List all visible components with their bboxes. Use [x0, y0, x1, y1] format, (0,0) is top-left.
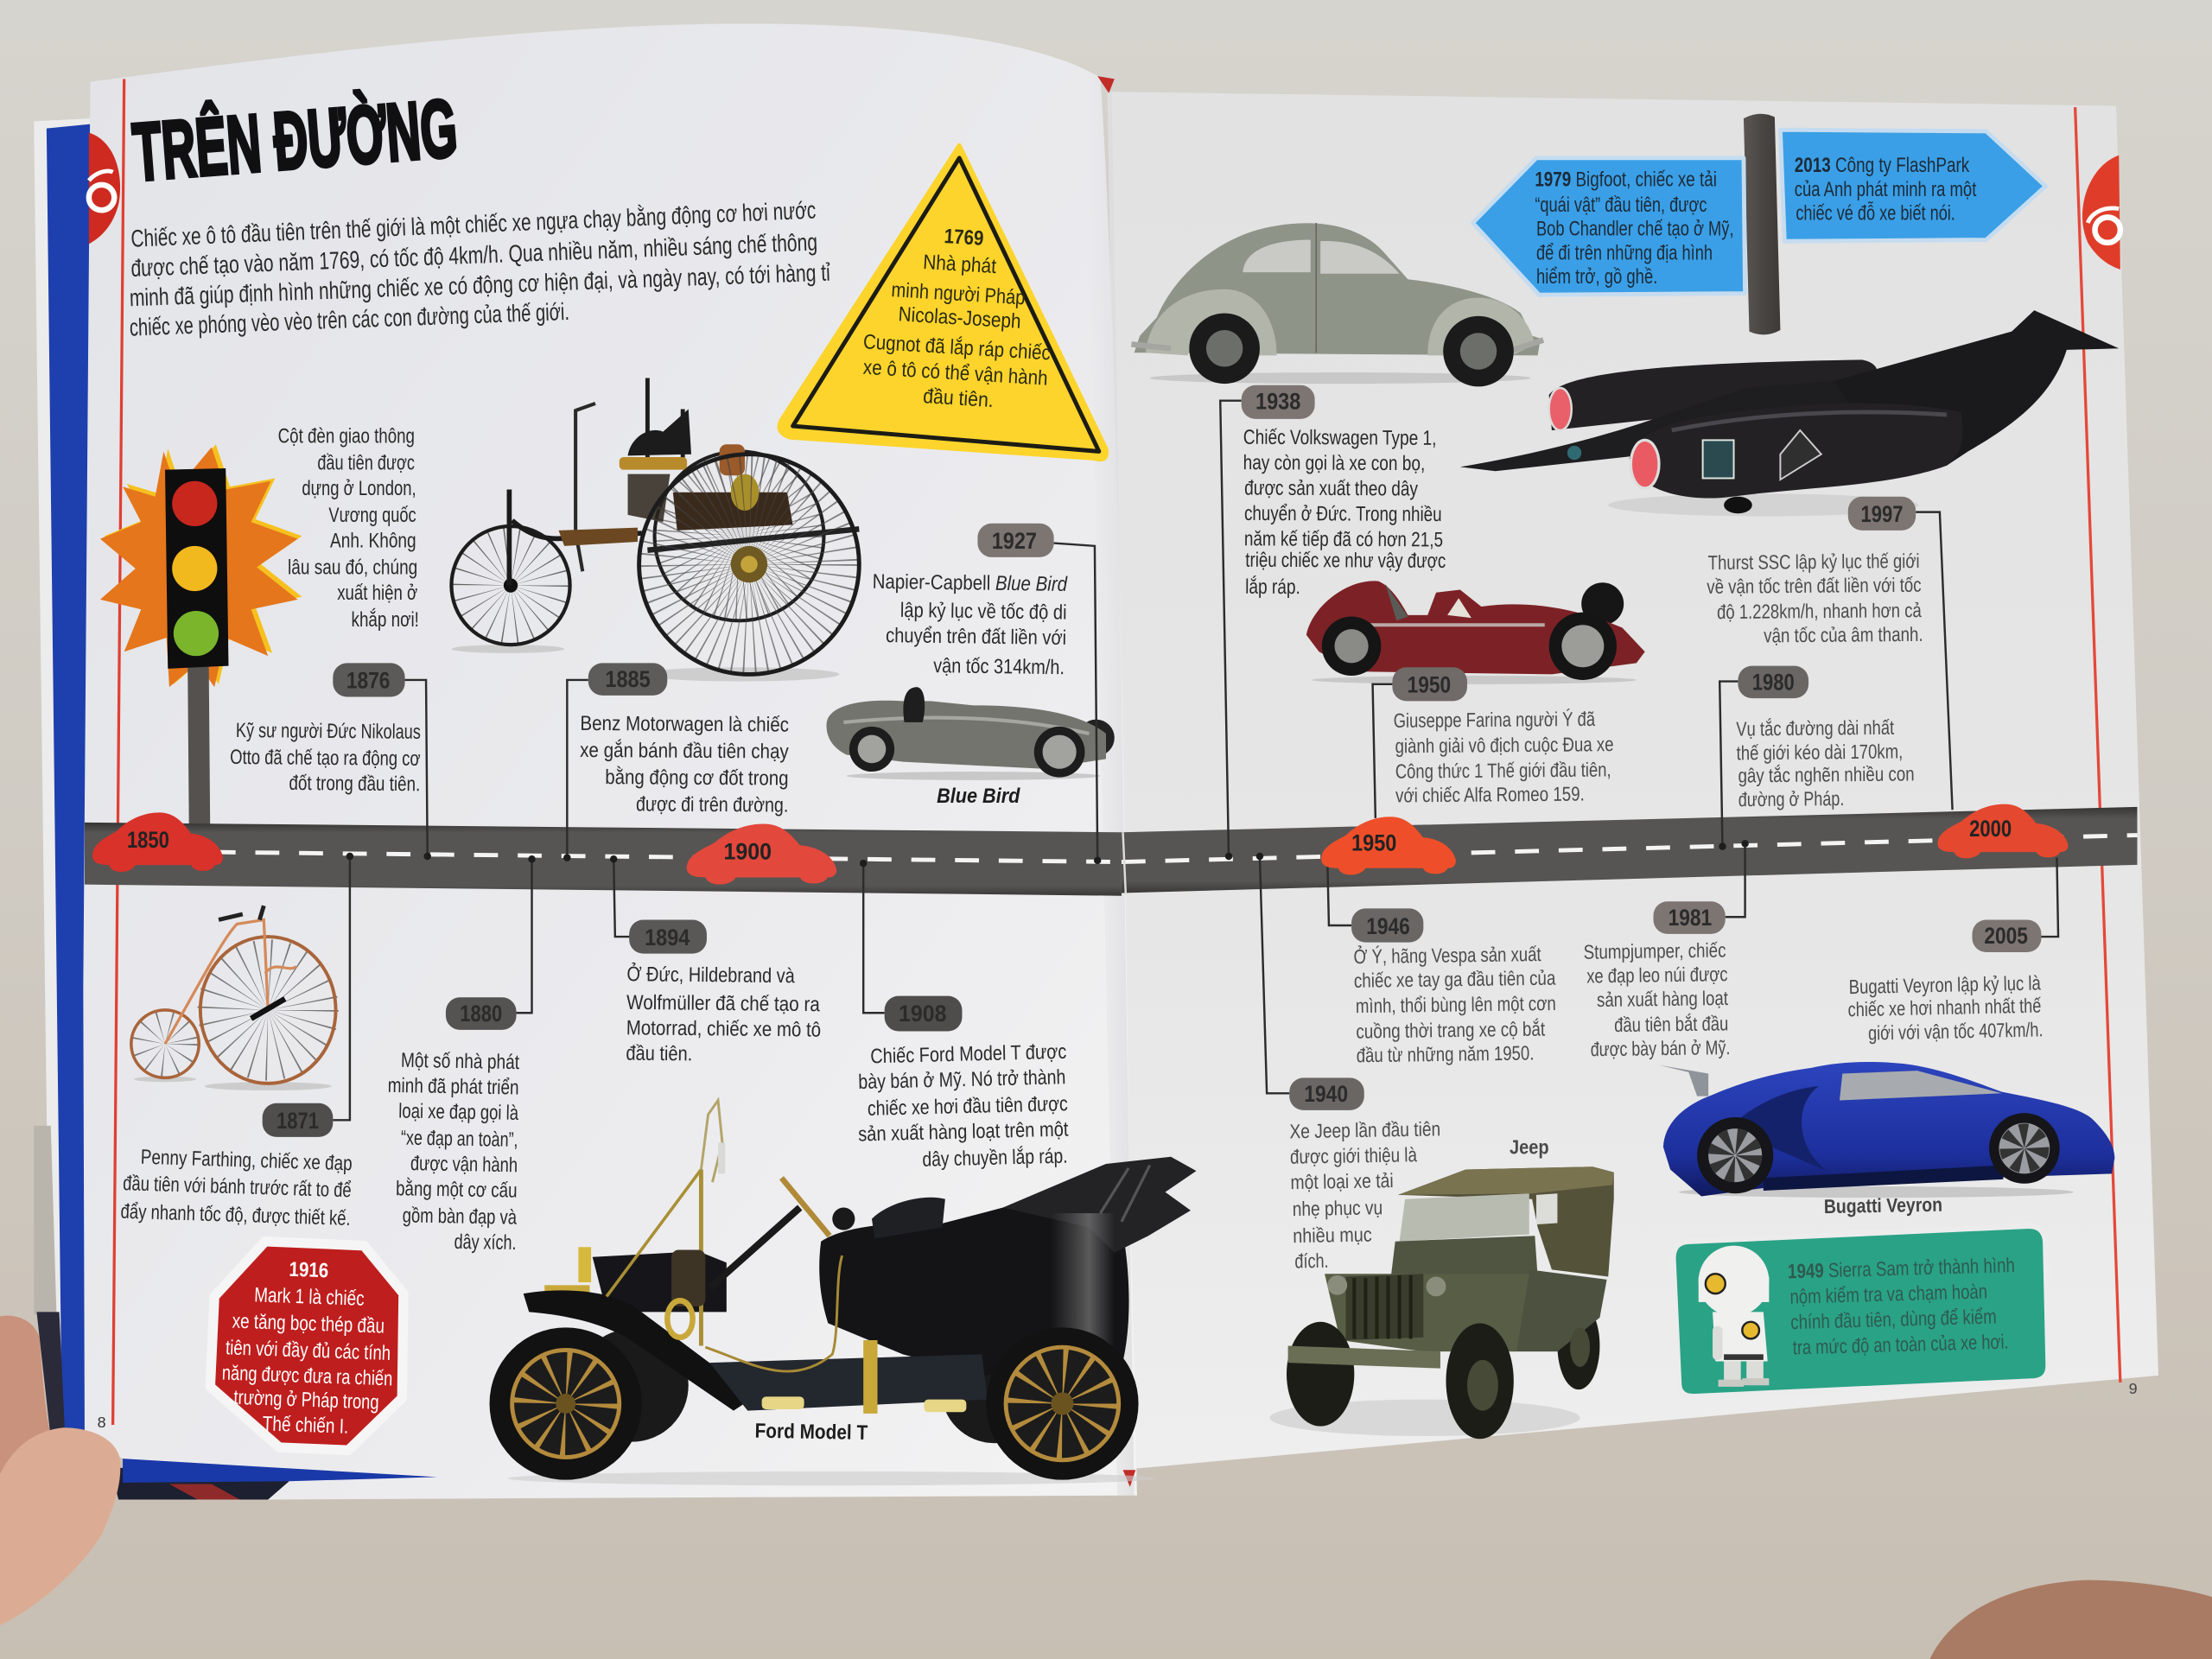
- text 1880: “xe đạp an toàn”,: [401, 1127, 518, 1152]
- year tag 2005: [1972, 919, 2041, 952]
- text 1894: Ở Đức, Hildebrand và: [626, 961, 796, 988]
- text 1894: [626, 961, 822, 1067]
- icon: crash test dummy: [1699, 1246, 1769, 1387]
- title: TRÊN ĐƯỜNG: [130, 82, 461, 199]
- text 1885: được đi trên đường.: [636, 792, 788, 817]
- year tag 1927: [977, 524, 1054, 557]
- text 1927: lập kỷ lục về tốc độ di: [900, 599, 1067, 625]
- year tag 1894: 1894: [645, 925, 690, 950]
- text 1880: Một số nhà phát: [401, 1049, 520, 1074]
- text 1871: [120, 1145, 353, 1230]
- blue sign 1979: Bob Chandler chế tạo ở Mỹ,: [1536, 218, 1734, 241]
- text 1927: vận tốc 314km/h.: [933, 654, 1065, 679]
- text 1876: Otto đã chế tạo ra động cơ: [230, 746, 421, 771]
- text 1880: gồm bàn đạp và: [403, 1204, 518, 1230]
- year tag 1894: [629, 919, 707, 954]
- text 1938: chuyển ở Đức. Trong nhiều: [1244, 502, 1442, 526]
- image: Benz Motorwagen: [451, 378, 859, 682]
- year tag 1876: 1876: [346, 668, 390, 694]
- traffic light text: Cột đèn giao thông: [278, 425, 415, 448]
- label: Blue Bird: Blue Bird: [937, 785, 1021, 808]
- text 1938: hay còn gọi là xe con bọ,: [1243, 451, 1425, 475]
- traffic light text: xuất hiện ở: [337, 582, 417, 605]
- text 1885: [580, 712, 789, 817]
- traffic light text: Vương quốc: [328, 504, 416, 527]
- text 1876: đốt trong đầu tiên.: [289, 772, 420, 796]
- octagon sign 1916: [210, 1242, 404, 1450]
- timeline road: [85, 807, 2137, 896]
- text 1997: độ 1.228km/h, nhanh hơn cả: [1717, 599, 1922, 623]
- label: Jeep: Jeep: [1510, 1136, 1549, 1159]
- text 1938: triệu chiếc xe như vậy được: [1245, 549, 1446, 573]
- car marker 2000: [1937, 804, 2068, 858]
- year tag 1876: [333, 663, 405, 697]
- image: Thrust SSC: [1460, 310, 2119, 517]
- octagon sign 1916: xe tăng bọc thép đầu: [232, 1310, 385, 1338]
- text 1871: đẩy nhanh tốc độ, được thiết kế.: [120, 1200, 351, 1230]
- year tag 1927: 1927: [992, 528, 1037, 554]
- text 1950: Giuseppe Farina người Ý đã: [1394, 708, 1595, 732]
- text 1981: sản xuất hàng loạt: [1597, 987, 1729, 1011]
- panel: 1949 crash test dummy: [1673, 1226, 2049, 1396]
- year tag 1980: [1738, 666, 1808, 698]
- traffic light text: lâu sau đó, chúng: [288, 556, 417, 579]
- year tag 1885: 1885: [605, 666, 651, 692]
- text 1938: Chiếc Volkswagen Type 1,: [1243, 426, 1437, 450]
- text 1949: chính đầu tiên, dùng để kiểm: [1790, 1306, 1997, 1333]
- warning sign 1769: minh người Pháp: [891, 278, 1026, 309]
- year tag 1871: 1871: [276, 1108, 319, 1134]
- image: Jeep: [1269, 1166, 1614, 1439]
- year tag 1938: [1242, 385, 1315, 419]
- year tag 1980: 1980: [1752, 669, 1795, 695]
- text 1927: [871, 570, 1068, 679]
- blue sign 1979: hiểm trở, gồ ghề.: [1536, 265, 1657, 289]
- label: Ford Model T: Ford Model T: [754, 1420, 868, 1445]
- red margin line right: [2075, 107, 2120, 1382]
- year tag 1940: 1940: [1304, 1081, 1348, 1107]
- text 1997: [1707, 550, 1923, 647]
- warning sign 1769: [779, 145, 1107, 460]
- text 1894: Wolfmüller đã chế tạo ra: [626, 991, 821, 1016]
- text 1950: với chiếc Alfa Romeo 159.: [1395, 783, 1585, 806]
- label: Bugatti Veyron: Bugatti Veyron: [1824, 1193, 1942, 1217]
- year tag 1997: [1848, 497, 1916, 531]
- text 1946: [1353, 941, 1557, 1066]
- image: Penny Farthing: [131, 906, 336, 1090]
- icon: red tab left: [89, 132, 120, 244]
- image: Ford Model T: [490, 1100, 1196, 1485]
- text 1981: được bày bán ở Mỹ.: [1591, 1036, 1731, 1060]
- text 1938: được sản xuất theo dây: [1244, 476, 1418, 501]
- text 1908: [856, 1040, 1070, 1173]
- left page: [83, 23, 1137, 1500]
- text 1938: năm kế tiếp đã có hơn 21,5: [1244, 527, 1443, 551]
- year tag 1908: 1908: [899, 1001, 947, 1027]
- year tag 2005: 2005: [1984, 923, 2028, 949]
- spine ribbon marks: [1097, 76, 1135, 1487]
- octagon sign 1916: trường ở Pháp trong: [233, 1386, 379, 1414]
- text 1950: [1394, 708, 1614, 806]
- octagon sign 1916: năng được đưa ra chiến: [221, 1362, 393, 1390]
- text 1894: Motorrad, chiếc xe mô tô: [626, 1016, 821, 1042]
- connector lines and dots: [333, 401, 2058, 1120]
- octagon sign 1916: tiên với đầy đủ các tính: [226, 1336, 391, 1365]
- blue sign 1979: [1472, 158, 1745, 295]
- text 1949: [1788, 1254, 2018, 1359]
- traffic light text: [278, 425, 419, 632]
- text 2005: giới với vận tốc 407km/h.: [1868, 1018, 2044, 1045]
- warning sign 1769: 1769: [944, 225, 984, 251]
- car marker 2000: 2000: [1969, 816, 2012, 842]
- warning sign 1769: Nhà phát: [922, 251, 997, 278]
- text 1940: được giới thiệu là: [1290, 1143, 1417, 1168]
- text 1927: Napier-Capbell Blue Bird: [873, 570, 1068, 596]
- text 1946: đầu từ những năm 1950.: [1357, 1041, 1535, 1066]
- text 1980: [1736, 715, 1915, 810]
- text 1908: Chiếc Ford Model T được: [870, 1040, 1067, 1068]
- image: VW Beetle: [1131, 223, 1543, 386]
- text 1871: đầu tiên với bánh trước rất to để: [123, 1172, 352, 1202]
- car marker 1850: [92, 812, 223, 872]
- text 1981: Stumpjumper, chiếc: [1583, 938, 1726, 963]
- text 1946: Ở Ý, hãng Vespa sản xuất: [1353, 941, 1541, 968]
- book cover edge: [34, 118, 296, 1500]
- text 1949: 1949 Sierra Sam trở thành hình: [1788, 1254, 2015, 1282]
- text 1940: nhẹ phục vụ: [1292, 1196, 1382, 1220]
- text 1940: [1289, 1117, 1443, 1273]
- text 2005: Bugatti Veyron lập kỷ lục là: [1848, 971, 2041, 998]
- warning sign 1769: xe ô tô có thể vận hành: [862, 356, 1048, 391]
- text 1885: Benz Motorwagen là chiếc: [580, 712, 789, 737]
- text 1997: Thurst SSC lập kỷ lục thế giới: [1708, 550, 1920, 574]
- car marker 1950: [1321, 817, 1456, 875]
- text 1938: lắp ráp.: [1245, 575, 1300, 599]
- text 1940: một loại xe tải: [1290, 1169, 1394, 1193]
- bottom blue strip: [123, 1459, 437, 1483]
- year tag 1997: 1997: [1860, 501, 1903, 527]
- blue sign 2013: chiếc vé đỗ xe biết nói.: [1796, 202, 1955, 226]
- text 1908: bày bán ở Mỹ. Nó trở thành: [858, 1065, 1066, 1094]
- text 1946: mình, thổi bùng lên một cơn: [1356, 992, 1556, 1017]
- year tag 1950: 1950: [1408, 672, 1451, 698]
- text 1997: về vận tốc trên đất liền với tốc: [1707, 574, 1922, 598]
- year tag 1871: [263, 1103, 333, 1137]
- icon: red tab right: [2082, 156, 2120, 270]
- car marker 1850: 1850: [127, 827, 169, 853]
- text 1980: gây tắc nghẽn nhiều con: [1738, 762, 1915, 786]
- text 1871: Penny Farthing, chiếc xe đạp: [140, 1146, 353, 1175]
- photo: hand left: [0, 1316, 120, 1625]
- text 1908: dây chuyền lắp ráp.: [922, 1145, 1068, 1172]
- warning sign 1769: đầu tiên.: [922, 385, 995, 412]
- year tag 1981: 1981: [1669, 905, 1712, 931]
- intro text: chiếc xe phóng vèo vèo trên các con đường của thế giới.: [129, 298, 569, 341]
- page number 8: 8: [98, 1414, 106, 1431]
- text 1880: [385, 1048, 520, 1255]
- year tag 1908: [885, 996, 962, 1031]
- text 1980: đường ở Pháp.: [1738, 787, 1844, 810]
- octagon sign 1916: Thế chiến I.: [262, 1412, 349, 1439]
- red margin line left: [113, 79, 124, 1425]
- text 1885: bằng động cơ đốt trong: [605, 766, 789, 791]
- text 1997: vận tốc của âm thanh.: [1764, 623, 1923, 646]
- text 1981: đầu tiên bắt đầu: [1614, 1012, 1728, 1036]
- text 1894: đầu tiên.: [626, 1042, 692, 1065]
- text 1949: tra mức độ an toàn của xe hơi.: [1792, 1331, 2009, 1358]
- year tag 1950: [1392, 667, 1467, 701]
- spine shading: [1086, 71, 1135, 1496]
- year tag 1946: [1351, 908, 1423, 943]
- warning sign 1769: Nicolas-Joseph: [898, 302, 1021, 334]
- text 1980: Vụ tắc đường dài nhất: [1736, 716, 1895, 741]
- year tag 1880: 1880: [460, 1001, 502, 1027]
- intro text: được chế tạo vào năm 1769, có tốc độ 4km/h. Qua nhiều năm, nhiều sáng chế thông: [130, 228, 818, 282]
- text 1938: [1243, 426, 1446, 600]
- text 2005: chiếc xe hơi nhanh nhất thế: [1847, 995, 2042, 1020]
- right page: [1108, 92, 2158, 1469]
- text 1940: Xe Jeep lần đầu tiên: [1289, 1117, 1440, 1142]
- text 1880: được vận hành: [410, 1152, 518, 1177]
- car marker 1950: 1950: [1351, 830, 1396, 855]
- image: Bugatti Veyron: [1659, 1062, 2114, 1198]
- warning sign 1769: Cugnot đã lắp ráp chiếc: [862, 330, 1052, 365]
- photo: finger right: [1929, 1580, 2212, 1659]
- text 1880: dây xích.: [454, 1230, 517, 1255]
- traffic light text: dựng ở London,: [302, 477, 416, 500]
- text 1946: chiếc xe tay ga đầu tiên của: [1354, 967, 1556, 992]
- year tag 1946: 1946: [1366, 913, 1410, 939]
- year tag 1885: [588, 663, 667, 696]
- traffic light text: đầu tiên được: [317, 452, 415, 475]
- image: Blue Bird: [827, 687, 1115, 780]
- text 1908: sản xuất hàng loạt trên một: [858, 1118, 1069, 1146]
- text 1981: [1583, 938, 1731, 1060]
- text 2005: [1847, 971, 2044, 1045]
- year tag 1940: [1289, 1077, 1364, 1110]
- text 1880: minh đã phát triển: [388, 1074, 519, 1100]
- blue sign 2013: của Anh phát minh ra một: [1795, 178, 1977, 201]
- text 1876: [230, 719, 421, 796]
- year tag 1981: [1653, 901, 1726, 934]
- car marker 1900: [687, 823, 836, 885]
- octagon sign 1916: 1916: [289, 1258, 329, 1282]
- blue sign 2013: [1780, 130, 2045, 241]
- text 1940: đích.: [1294, 1249, 1329, 1272]
- traffic light text: Anh. Không: [330, 529, 416, 552]
- year tag 1938: 1938: [1255, 388, 1300, 414]
- blue sign 1979: để đi trên những địa hình: [1536, 241, 1713, 264]
- page number 9: 9: [2129, 1380, 2138, 1397]
- text 1950: giành giải vô địch cuộc Đua xe: [1395, 733, 1614, 757]
- text 1981: xe đạp leo núi được: [1586, 963, 1728, 987]
- blue sign 1979: “quái vật” đầu tiên, được: [1535, 194, 1707, 217]
- blue sign 1979: 1979 Bigfoot, chiếc xe tải: [1535, 168, 1717, 192]
- year tag 1880: [446, 997, 517, 1030]
- text 1876: Kỹ sư người Đức Nikolaus: [236, 719, 421, 744]
- text 1946: cuồng thời trang xe cộ bắt: [1356, 1018, 1546, 1043]
- text 1908: chiếc xe hơi đầu tiên được: [868, 1092, 1068, 1121]
- icon: traffic light: [100, 444, 302, 832]
- car marker 1900: 1900: [724, 838, 772, 864]
- octagon sign 1916: Mark 1 là chiếc: [254, 1283, 365, 1311]
- sign pole: [1744, 114, 1780, 334]
- text 1927: chuyển trên đất liền với: [886, 624, 1066, 650]
- text 1880: bằng một cơ cấu: [396, 1177, 518, 1203]
- text 1950: Công thức 1 Thế giới đầu tiên,: [1395, 758, 1611, 783]
- intro text: Chiếc xe ô tô đầu tiên trên thế giới là một chiếc xe ngựa chạy bằng động cơ hơi nước: [130, 197, 817, 252]
- text 1940: nhiều mục: [1293, 1224, 1372, 1247]
- blue sign 2013: 2013 Công ty FlashPark: [1795, 154, 1969, 177]
- intro text: minh đã giúp định hình những chiếc xe có động cơ hiện đại, và ngày nay, có tới hàng tỉ: [129, 259, 831, 311]
- text 1885: xe gắn bánh đầu tiên chạy: [580, 739, 789, 764]
- text 1949: nộm kiểm tra va chạm hoàn: [1789, 1280, 1987, 1308]
- image: Alfa Romeo 159: [1306, 581, 1645, 684]
- text 1880: loại xe đạp gọi là: [398, 1099, 519, 1125]
- traffic light text: khắp nơi!: [352, 608, 419, 632]
- intro text: [129, 197, 831, 341]
- text 1980: thế giới kéo dài 170km,: [1736, 740, 1903, 764]
